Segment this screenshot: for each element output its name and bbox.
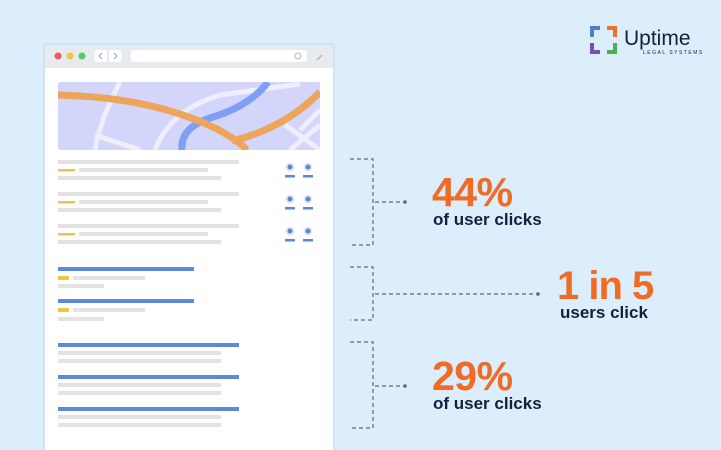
logo: LEGAL SYSTEMS — [643, 50, 704, 56]
local results list — [58, 160, 313, 244]
bracket 1 with arrow — [350, 159, 407, 245]
stat: 1 in 5: users click — [560, 303, 648, 322]
map banner — [58, 82, 320, 150]
stat: 44% — [432, 169, 542, 229]
bracket 3 with arrow — [350, 342, 407, 428]
browser header bar — [45, 45, 333, 68]
browser window — [43, 43, 335, 450]
stat: 44%: of user clicks — [433, 210, 542, 229]
logo — [592, 27, 704, 56]
stat: 29%: 29% — [432, 353, 513, 399]
stat: 1 in 5: 1 in 5 — [557, 264, 654, 308]
bracket 2 with arrow — [350, 267, 540, 320]
logo: Uptime — [624, 27, 691, 50]
stat: 29% — [432, 353, 542, 413]
stat: 29%: of user clicks — [433, 394, 542, 413]
organic results — [58, 343, 239, 427]
ads results — [58, 267, 194, 321]
stat: 44%: 44% — [432, 169, 513, 215]
